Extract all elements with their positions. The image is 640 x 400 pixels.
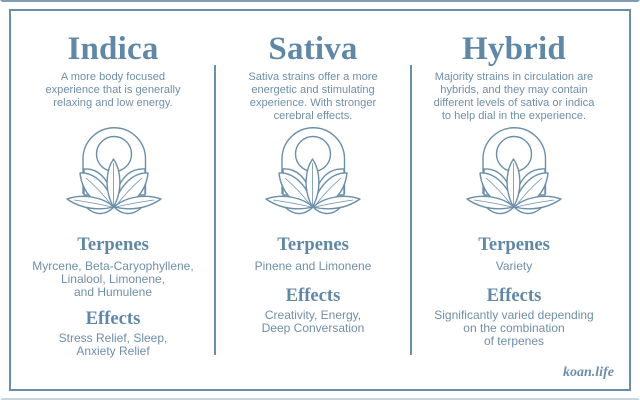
text: Sativa description: energetic and stimulating: [251, 84, 375, 96]
text: Hybrid description: [434, 71, 594, 122]
text: Indica terpenes: and Humulene: [74, 285, 152, 299]
heading: Sativa: Sativa: [268, 31, 358, 67]
column divider right: [410, 65, 412, 355]
text: Sativa effects: Creativity, Energy,: [265, 308, 361, 322]
text: Sativa description: [248, 71, 378, 122]
text: Indica effects: Anxiety Relief: [76, 344, 150, 358]
text: Indica terpenes: [32, 259, 194, 299]
heading: Effects: Effects: [286, 285, 340, 306]
text: Indica effects: [59, 331, 167, 358]
text: Hybrid effects: on the combination: [463, 321, 565, 335]
text: Hybrid terpenes: Variety: [496, 259, 532, 273]
text: Sativa terpenes: Pinene and Limonene: [255, 259, 371, 273]
heading: Terpenes: Terpenes: [77, 234, 149, 255]
text: Hybrid effects: [434, 308, 594, 348]
text: Hybrid description: different levels of sativa or indica: [434, 97, 594, 109]
panel: Sativa: [248, 31, 378, 335]
text: Sativa description: experience. With stronger: [250, 97, 376, 109]
heading: Terpenes: Terpenes: [478, 234, 550, 255]
text: Indica description: [45, 71, 181, 109]
column divider left: [214, 65, 216, 355]
text: Hybrid effects: Significantly varied depending: [434, 308, 594, 322]
text: Hybrid effects: of terpenes: [484, 334, 544, 348]
text: Sativa effects: [262, 308, 364, 335]
icon: lotus arch: [66, 127, 162, 214]
heading: Terpenes: Terpenes: [277, 234, 349, 255]
text: Indica description: relaxing and low energy.: [53, 97, 173, 109]
heading: Indica: Indica: [67, 31, 159, 67]
text: Sativa description: cerebral effects.: [274, 110, 352, 122]
text: Sativa effects: Deep Conversation: [262, 321, 364, 335]
panel: Hybrid: [434, 31, 594, 348]
heading: Effects: Effects: [487, 285, 541, 306]
logo: koan.life: koan.life: [563, 365, 614, 380]
text: Indica description: A more body focused: [61, 71, 165, 83]
text: Sativa description: Sativa strains offer a more: [248, 71, 378, 83]
icon: lotus arch: [265, 127, 361, 214]
heading: Effects: Effects: [86, 308, 140, 329]
text: Hybrid description: Majority strains in circulation are: [435, 71, 593, 83]
text: Indica terpenes: Linalool, Limonene,: [61, 272, 165, 286]
text: Indica effects: Stress Relief, Sleep,: [59, 331, 167, 345]
text: Hybrid description: to help dial in the experience.: [442, 110, 586, 122]
icon: lotus arch: [466, 127, 562, 214]
text: Indica terpenes: Myrcene, Beta-Caryophyllene,: [32, 259, 194, 273]
panel: Indica: [32, 31, 194, 358]
heading: Hybrid: Hybrid: [462, 31, 566, 67]
text: Indica description: experience that is generally: [45, 84, 181, 96]
text: Hybrid description: hybrids, and they may contain: [440, 84, 588, 96]
